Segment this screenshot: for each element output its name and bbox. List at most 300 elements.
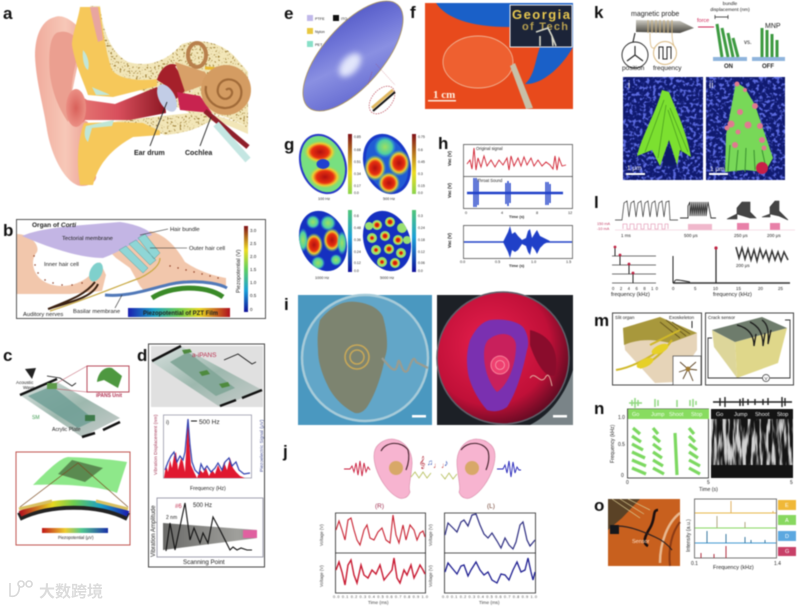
current labels: -10 mA — [597, 227, 610, 231]
inset text: Georgia — [512, 7, 571, 22]
ticks left: 0 2 4 6 8 10 — [612, 286, 659, 291]
circuit — [708, 320, 790, 378]
colorbar ticks: 0.18 — [418, 238, 425, 242]
SEM i strands — [645, 100, 688, 158]
blue notes: ♫ — [427, 458, 433, 467]
position icon — [622, 42, 648, 68]
black words: Go — [716, 412, 723, 418]
swatch letters: G — [785, 549, 789, 555]
panel o: violin sensor — [594, 496, 796, 571]
swatch A — [778, 515, 796, 525]
wires — [411, 472, 457, 479]
inset signal — [736, 247, 788, 261]
spiral ring — [496, 360, 504, 370]
treble clef: 𝄞 — [419, 456, 426, 469]
disc — [286, 0, 420, 127]
colorbar ticks: 1.0 — [250, 280, 257, 285]
strip label: Piezopotential of PZT Film — [143, 311, 218, 317]
colorbar ticks: 0.6 — [418, 148, 423, 152]
colorbar top tick: 3.0 — [250, 228, 257, 233]
pale tube — [216, 124, 248, 160]
colorbar ticks: 2.5 — [250, 241, 257, 246]
original signal trace — [467, 148, 566, 170]
large ticks: 15 — [736, 286, 741, 291]
outer ear — [35, 16, 96, 186]
OFF: OFF — [762, 64, 774, 70]
ON: ON — [724, 64, 733, 70]
ticks: 1.5 — [566, 260, 571, 264]
D peaks — [707, 531, 765, 543]
SEM ii background — [706, 77, 785, 180]
f-hole — [645, 510, 658, 546]
PZT arc — [20, 503, 128, 514]
SEM ii cluster — [756, 162, 768, 174]
green title band — [628, 409, 709, 419]
panel a: ear anatomy — [3, 4, 251, 186]
inset — [510, 5, 572, 47]
piezopotential strip — [128, 308, 230, 317]
frequency label large: frequency (kHz) — [713, 292, 752, 298]
green words: Shoot — [669, 412, 684, 418]
peak markers — [614, 246, 634, 274]
R top trace — [336, 515, 425, 545]
y label: Frequency (kHz) — [610, 424, 616, 463]
dish — [302, 295, 428, 421]
signal captions: Original signal — [476, 146, 503, 151]
position axes — [627, 33, 643, 61]
colorbar ticks: 0.0 — [354, 191, 359, 195]
mode 100 Hz — [298, 133, 348, 195]
SM label: SM — [32, 415, 40, 421]
ITO — [333, 15, 339, 21]
SEM ii noise — [706, 77, 785, 180]
spider — [679, 362, 697, 381]
panel n: spectrograms — [594, 397, 793, 493]
zoom lines — [20, 463, 128, 507]
coil — [648, 20, 672, 33]
stimulus 2 — [737, 223, 780, 230]
plot frames — [464, 144, 572, 258]
y label 4: Voltage (V) — [428, 565, 433, 587]
displacement bracket — [715, 15, 728, 19]
OFF bundle — [762, 28, 777, 57]
mode 1000 Hz — [298, 210, 348, 272]
SEM ii strands — [728, 145, 766, 172]
SEM ii scale bar — [709, 173, 728, 175]
colorbars — [348, 134, 416, 272]
dark shadow — [530, 330, 556, 376]
y label 1: Vac (V) — [447, 150, 452, 166]
cracks — [737, 320, 771, 346]
ear canal — [70, 87, 166, 124]
A baseline — [695, 527, 776, 529]
xy axis — [47, 376, 76, 386]
small spectra — [612, 256, 656, 283]
semicircular canal — [188, 43, 206, 67]
arc underside — [19, 506, 128, 517]
block left face — [712, 330, 737, 378]
crack sensor title: Crack sensor — [708, 315, 736, 320]
auditory nerves — [48, 282, 98, 309]
3D render background — [151, 346, 263, 407]
upper fat tissue — [72, 7, 157, 97]
exoskeleton title: Exoskeleton — [669, 315, 694, 320]
SEM i noise — [623, 77, 703, 180]
colorbar ticks: 0.12 — [418, 250, 425, 254]
heading e: e — [284, 4, 293, 23]
colorbar ticks: 0.3 — [418, 214, 423, 218]
colorbar ticks: 2.0 — [250, 254, 257, 259]
200 us block — [762, 201, 788, 220]
acoustic wave icon — [25, 368, 36, 379]
force label: force — [697, 18, 709, 24]
legend text: Nylon — [315, 30, 325, 34]
blue area — [436, 3, 573, 84]
500 Hz callout — [191, 420, 197, 422]
y ticks: 0 — [621, 473, 624, 479]
legend label: Piezopotential (μV) — [58, 535, 94, 540]
V: V — [764, 376, 768, 381]
inset scale: 200 μs — [736, 263, 750, 268]
pink spiral — [491, 356, 509, 374]
swatch E — [778, 500, 796, 510]
cochlea spiral — [206, 79, 241, 108]
colorbar ticks: 0.12 — [354, 261, 361, 265]
G peaks — [701, 546, 726, 558]
vestibule — [175, 62, 212, 92]
x ticks right: 0.0 0.1 0.2 0.3 0.4 0.5 0.6 0.7 0.8 0.9 1.0 — [442, 595, 537, 599]
colorbar ticks: 0.06 — [418, 261, 425, 265]
membrane — [28, 386, 95, 428]
upper bone — [90, 6, 248, 128]
colorbar ticks: 0.15 — [418, 184, 425, 188]
colorbar ticks: 0.0 — [418, 191, 423, 195]
amplitude trace — [166, 503, 252, 551]
red notes: ♩♩ — [433, 461, 449, 470]
nylon — [307, 28, 313, 34]
colorbar — [244, 226, 248, 312]
frequency captions: 1000 Hz — [315, 276, 329, 280]
violin edge inner — [669, 522, 680, 566]
throat baseline — [467, 192, 563, 194]
icon labels: frequency — [653, 65, 682, 72]
ticks: 0.5 — [495, 260, 500, 264]
zoom bursts — [503, 226, 550, 258]
small spectra peaks — [615, 248, 633, 283]
throat bursts — [474, 178, 550, 207]
x ticks: 5 — [707, 480, 710, 486]
slit organ box — [612, 313, 702, 385]
acoustic label: Wave — [23, 385, 35, 390]
label ear drum: Ear drum — [134, 150, 165, 157]
plate edges — [20, 379, 120, 437]
y label 2: Voltage (V) — [319, 565, 324, 587]
purple ear — [467, 319, 528, 411]
sensor cable — [618, 526, 672, 550]
lower bone stipple — [120, 113, 215, 135]
dark corner — [608, 499, 640, 530]
plate — [152, 347, 262, 407]
heading l: l — [594, 193, 599, 212]
SEM i label: i — [628, 80, 630, 91]
PET — [307, 41, 313, 47]
icon labels: position — [622, 65, 645, 72]
unit 2 — [85, 415, 95, 421]
panel d: iPANS vibration — [137, 344, 265, 567]
green words: Go — [632, 412, 639, 418]
heading j: j — [282, 442, 288, 461]
ticks: 4 — [501, 211, 503, 215]
right tissue — [112, 231, 226, 292]
brand text: 大数跨境 — [39, 582, 103, 601]
ticks: 0 — [465, 211, 467, 215]
x label: Time (s) — [699, 487, 718, 493]
lower fat tissue — [78, 122, 160, 185]
ossicle chain — [176, 66, 192, 92]
tapered membrane — [163, 523, 257, 550]
panel m: slit organ and crack sensor — [594, 311, 794, 385]
legend text: PTFE — [315, 17, 325, 21]
axis — [224, 354, 256, 364]
green harmonics — [632, 428, 700, 475]
large ticks: 25 — [778, 286, 783, 291]
block side — [735, 328, 787, 378]
voltmeter — [762, 374, 770, 382]
crack sensor box — [706, 313, 794, 385]
SEM i bundle — [637, 90, 691, 166]
large spectrum DC — [673, 256, 690, 283]
left earpiece — [465, 461, 479, 475]
logo mark — [10, 581, 32, 596]
labels: Outer hair cell — [189, 246, 225, 252]
500 Hz text: 500 Hz — [199, 419, 220, 426]
displacement bars — [164, 418, 245, 478]
baselines — [615, 229, 795, 231]
y axis left: Vibration Displacement (nm) — [153, 414, 159, 475]
sensor chip — [610, 525, 619, 534]
blue wave — [497, 461, 521, 477]
colorbar ticks: 0.51 — [354, 160, 361, 164]
SEM i background — [623, 77, 703, 180]
ON bundle — [717, 24, 738, 57]
units — [182, 349, 230, 388]
magnifier — [364, 81, 400, 119]
L label: (L) — [487, 503, 495, 510]
timing labels: 1 ms — [621, 233, 632, 238]
colorbar ticks: 0.17 — [354, 184, 361, 188]
heading a: a — [3, 4, 13, 23]
frequency captions: 500 Hz — [383, 197, 395, 201]
gold spiral inner — [350, 350, 364, 364]
colorbar ticks: 0.6 — [354, 214, 359, 218]
D baseline — [695, 542, 776, 544]
SEM ii bundle — [725, 82, 773, 172]
frequency icon — [654, 42, 676, 64]
colorbar ticks: 0.24 — [354, 250, 361, 254]
2 nm scale: 2 nm — [166, 515, 177, 521]
sensor label: Sensor — [632, 539, 650, 545]
heading c: c — [3, 346, 12, 365]
leaders — [115, 229, 187, 308]
panel c: iPANS on plate — [3, 346, 130, 545]
colorbar ticks: 0.0 — [354, 269, 359, 273]
labels: Inner hair cell — [44, 262, 79, 268]
zoom baseline — [464, 241, 572, 243]
right ear helix — [381, 443, 409, 470]
colorbar ticks: 0.48 — [354, 226, 361, 230]
signal captions: Throat Sound — [477, 178, 503, 183]
right photo background — [437, 295, 573, 425]
left photo background — [298, 295, 432, 425]
x axis: Frequency (Hz) — [190, 486, 226, 492]
green words: Jump — [651, 412, 664, 418]
yellow nerve — [50, 258, 160, 311]
outer hair cells — [119, 234, 160, 273]
axis labels: Time (s) — [509, 214, 525, 219]
grey ear — [318, 302, 387, 413]
auditory nerve — [205, 68, 247, 82]
ON base — [713, 57, 747, 61]
y axis: Vibration Amplitude — [151, 505, 157, 557]
electrodes — [19, 501, 128, 509]
plate — [20, 382, 120, 437]
legend bar — [42, 528, 108, 533]
x label left: Time (ms) — [368, 600, 389, 605]
frame — [16, 220, 266, 318]
green plot frame — [628, 409, 708, 478]
PZT film — [152, 288, 223, 298]
E peaks — [731, 501, 773, 513]
swatch letters: A — [785, 518, 789, 524]
plate edge — [152, 346, 262, 406]
R label: (R) — [375, 503, 384, 510]
axis labels: Time (s) — [509, 263, 525, 268]
lower bone — [114, 112, 248, 135]
x label: Frequency (kHz) — [713, 565, 754, 571]
ticks: 12 — [568, 211, 572, 215]
L top trace — [445, 514, 535, 549]
colorbar ticks: 0.85 — [354, 135, 361, 139]
y label 3: Voltage (V) — [428, 524, 433, 546]
stimulus pulses — [623, 224, 668, 229]
y ticks: 0.5 — [618, 442, 625, 448]
colorbar ticks: 0.24 — [418, 226, 425, 230]
mode 500 Hz — [362, 133, 412, 195]
neuron body 2 — [635, 356, 655, 370]
large ticks: 20 — [758, 286, 763, 291]
ear drum membrane — [153, 81, 181, 115]
acoustic label: Acoustic — [16, 380, 34, 385]
x ticks left: 0.0 0.1 0.2 0.3 0.4 0.5 0.6 0.7 0.8 0.9 1.0 — [333, 595, 428, 599]
basilar membrane — [105, 282, 227, 295]
SEM ii particles — [724, 82, 766, 150]
glowing dish — [437, 292, 569, 424]
heading h: h — [438, 134, 448, 153]
timing labels: 250 μs — [734, 233, 748, 238]
left ear — [457, 439, 495, 498]
violin edge — [660, 513, 680, 563]
air cells — [83, 50, 110, 95]
colorbar ticks: 0.3 — [418, 172, 423, 176]
large spectrum peak — [715, 249, 717, 283]
scale bar — [428, 100, 456, 102]
inset text 2: of Tech — [522, 21, 568, 33]
spectrogram texture — [711, 419, 793, 465]
E baseline — [695, 512, 776, 514]
panel f: photo of sensor — [410, 3, 573, 109]
right earpiece — [389, 461, 403, 475]
green membrane — [33, 457, 127, 493]
plot ii frame — [157, 498, 263, 557]
heading m: m — [594, 311, 609, 330]
SEM ii label: ii — [709, 80, 713, 91]
spectrum frame — [694, 499, 776, 558]
zoom guide — [368, 64, 395, 85]
cross section — [372, 90, 393, 108]
y label 2: Vac (V) — [447, 182, 452, 198]
spider inset — [673, 356, 701, 385]
mode 5000 Hz — [362, 210, 412, 272]
y label: Intensity (a.u.) — [686, 519, 692, 552]
wire — [382, 358, 428, 372]
swatch letters: E — [785, 503, 789, 509]
bone stipple — [90, 6, 248, 128]
peak marker — [714, 246, 718, 250]
membrane circle — [443, 36, 513, 88]
title: Organ of Corti — [32, 222, 76, 229]
panel b: organ of Corti — [3, 220, 266, 318]
colorbar ticks: 0.34 — [354, 172, 361, 176]
large ticks: 10 — [713, 286, 718, 291]
right ear — [374, 439, 412, 498]
orange background — [425, 3, 573, 109]
coil leads — [650, 33, 676, 50]
concha shading — [49, 32, 82, 122]
scale bar — [553, 415, 567, 418]
SEM i scale: 1 μm — [627, 165, 642, 172]
middle ear — [177, 92, 212, 113]
heading f: f — [410, 3, 416, 22]
stimulus blocks — [688, 224, 712, 230]
bundle title: displacement (nm) — [710, 7, 750, 13]
labels: Auditory nerves — [23, 312, 63, 318]
black words: Shoot — [755, 412, 770, 418]
colorbar ticks: 0.75 — [418, 135, 425, 139]
magnetic probe label: magnetic probe — [631, 11, 679, 18]
left tissue — [17, 234, 106, 294]
cochlea — [201, 65, 251, 115]
air cell lower — [85, 120, 114, 142]
swatch D — [778, 531, 796, 541]
wire — [530, 375, 552, 386]
250 us block — [727, 202, 756, 219]
ticks: 1.0 — [531, 260, 536, 264]
panel l: pulse responses — [594, 193, 795, 298]
holder — [510, 63, 533, 109]
tissue block — [623, 317, 697, 383]
violin photo — [608, 499, 680, 566]
labels: Basilar membrane — [73, 309, 120, 315]
red tube — [205, 111, 248, 147]
red ear interior — [484, 334, 516, 392]
timing labels: 500 μs — [684, 233, 698, 238]
panel h: voice signals — [438, 134, 572, 268]
black words: Jump — [734, 412, 747, 418]
colorbar ticks: 0.0 — [418, 269, 423, 273]
swatch G — [778, 547, 796, 556]
colorbar ticks: 0.5 — [250, 293, 257, 298]
left ear helix — [461, 443, 489, 470]
